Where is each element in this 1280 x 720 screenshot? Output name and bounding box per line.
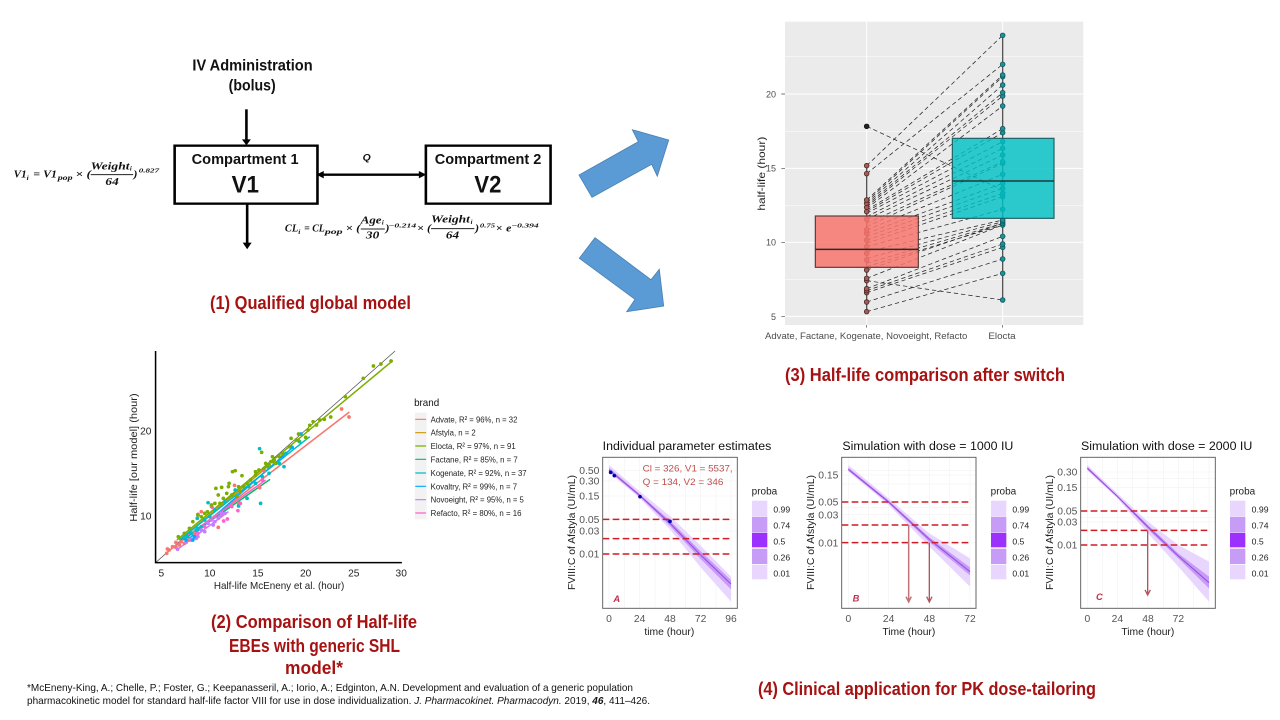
formula: V1 covariate model: Weight [91,161,131,172]
title: Simulation with dose = 2000 IU [1081,439,1252,453]
y axis labels [766,89,776,322]
panel border [603,457,737,608]
parameter annotation: Cl = 326, V1 = 5537, [643,464,733,474]
y axis labels: 0.01 [579,550,600,561]
legend: proba: 0.99 [1012,504,1029,514]
y axis title: FVIII:C of Afstyla (UI/mL) [1045,475,1056,590]
observed points [609,470,672,523]
x axis labels: 24 [1112,614,1123,625]
x axis labels [606,614,737,625]
panel C: simulation with dose 2000 IU [1045,439,1269,638]
caption: (2) Comparison of Half-life: EBEs with generic SHL [229,636,400,656]
y axis title: Half-life [our model] (hour) [129,393,140,522]
axis tick labels: 20 [300,569,312,580]
legend: brand: Elocta, R² = 97%, n = 91 [431,441,516,451]
axis tick labels: 5 [159,569,165,580]
panel: half-life scatter chart [129,351,527,592]
y axis labels: 0.03 [1057,518,1078,529]
regression lines [166,361,393,553]
parameter annotation: Q = 134, V2 = 346 [643,477,723,487]
legend: proba: 0.26 [1012,552,1029,562]
x axis labels: 48 [1142,614,1154,625]
formula: clearance covariate model: ) [474,223,479,234]
y axis title: FVIII:C of Afstyla (UI/mL) [567,475,578,590]
axis ticks [781,94,1003,328]
x axis labels: 0 [1084,614,1090,625]
footnote: reference: *McEneny-King, A.; Chelle, P.; Foster, G.; Keepanasseril, A.; Iorio, A.; Edginton, A.N. Development and evaluation of a generic population [27,682,633,694]
whiskers [867,35,1003,312]
formula: clearance covariate model: × ( [417,223,432,234]
x axis title: Time (hour) [882,627,935,638]
x axis labels: 24 [883,614,895,625]
box: compartment 2: V2 [474,171,501,198]
legend: proba: 0.01 [773,568,790,578]
legend: proba: 0.5 [1012,536,1025,546]
legend: proba: 0.74 [1252,520,1269,530]
legend: proba [1230,487,1269,579]
panel B: simulation with dose 1000 IU [806,439,1029,638]
legend: brand: Factane, R² = 85%, n = 7 [431,454,518,464]
data points: after switch [1000,33,1005,302]
y axis labels: 0.03 [579,527,600,538]
legend: brand: Kovaltry, R² = 99%, n = 7 [431,481,517,491]
legend: brand: brand [414,398,439,409]
axis tick labels: 10 [140,511,152,522]
formula: V1 covariate model: × ( [75,169,93,180]
formula: V1 covariate model: V1 [14,169,27,180]
formula: clearance covariate model [285,214,539,241]
legend: proba: 0.99 [1252,504,1269,514]
legend: proba: 0.01 [1012,568,1029,578]
y axis title: FVIII:C of Afstyla (UI/mL) [806,475,817,590]
formula: V1 covariate model: 64 [105,176,119,188]
footnote: reference: pharmacokinetic model for standard half-life factor VIII for use in dose individualization. J. Pharmacokinet. Pharmacodyn. 2019, 46, 411–426. [27,695,650,707]
y axis labels: 0.30 [579,477,600,488]
y axis labels [818,471,839,549]
threshold lines [842,502,971,543]
legend: proba: proba [991,487,1017,498]
y axis labels: 0.05 [818,498,839,509]
formula: clearance covariate model: i [382,220,384,227]
y axis labels: 0.50 [579,466,600,477]
box: compartment 2: Compartment 2 [435,152,541,168]
formula: clearance covariate model: i [471,219,473,226]
arrow: up to half-life comparison [579,130,669,197]
panel letter C: C [1096,592,1103,602]
formula: clearance covariate model: −0.394 [511,222,539,229]
grid [1081,457,1215,608]
legend: proba: 0.74 [1012,520,1029,530]
arrow: dose into compartment 1 [242,109,251,145]
axis tick labels: 20 [140,427,152,438]
x axis labels [1084,614,1184,625]
x axis labels: Advate, Factane, Kogenate, Novoeight, Refacto [765,331,967,341]
plot background and grid [785,22,1083,325]
formula: clearance covariate model: e [506,223,511,234]
caption: (1) Qualified global model: (1) Qualified global model [210,293,411,313]
probability ribbon [1087,465,1209,602]
heading: IV Administration: IV Administration [192,57,313,74]
probability ribbon [848,465,970,587]
y axis labels: 10 [766,238,776,248]
legend: brand: Afstyla, n = 2 [431,428,476,438]
y axis labels: 0.03 [818,510,839,521]
data points by brand [167,361,391,553]
panel border [1081,457,1215,608]
caption: (2) Comparison of Half-life: model* [285,658,343,678]
legend: proba: 0.99 [773,504,790,514]
y axis labels: 0.30 [1057,468,1078,479]
box: before switch [815,216,918,267]
x axis labels [845,614,976,625]
formula: clearance covariate model: pop [323,227,343,236]
box: compartment 2 [426,146,551,204]
arrow: exchange Q between compartments: Q [363,153,371,163]
y axis labels: 0.05 [1057,507,1078,518]
threshold lines [1081,511,1210,545]
data points: before switch [864,124,869,314]
box: compartment 1: V1 [232,171,259,198]
y axis labels: 20 [766,89,776,99]
x axis labels: Elocta [988,331,1016,341]
x axis labels: 72 [964,614,976,625]
probability ribbon [609,465,731,602]
legend: brand: Novoeight, R² = 95%, n = 5 [431,495,524,505]
x axis labels: 0 [845,614,851,625]
panel letter B: B [853,593,860,603]
formula: V1 covariate model: ) [133,169,138,180]
caption: (4) Clinical application for PK dose-tailoring: (4) Clinical application for PK dose-tailoring [758,679,1096,699]
paired dashed lines [867,35,1003,312]
formula: clearance covariate model: −0.214 [389,222,417,229]
formula: clearance covariate model: Age [360,215,381,226]
y axis labels: 0.05 [579,515,600,526]
parameter annotation [643,464,733,487]
x axis labels: 0 [606,614,612,625]
formula: clearance covariate model: 0.75 [480,222,496,229]
formula: V1 covariate model: 0.827 [139,167,160,175]
formula: V1 covariate model: i [27,174,29,182]
legend: brand: Advate, R² = 96%, n = 32 [431,414,518,424]
x axis labels: 48 [664,614,676,625]
panel: compartment model diagram [14,57,551,249]
legend: brand: Refacto, R² = 80%, n = 16 [431,508,522,518]
formula: V1 covariate model: i [130,166,132,173]
formula: clearance covariate model: × ( [346,223,362,234]
legend: brand: Kogenate, R² = 92%, n = 37 [431,468,527,478]
heading: IV Administration: (bolus) [229,77,276,94]
formula: clearance covariate model: CL [285,223,298,234]
panel border [842,457,976,608]
x axis labels: 24 [634,614,646,625]
axes [156,351,402,563]
y axis title: half-life (hour) [757,137,768,211]
legend: proba: 0.5 [773,536,786,546]
formula: clearance covariate model: ) [384,223,390,234]
legend: proba [752,487,790,579]
caption: (3) Half-life comparison after switch: (3) Half-life comparison after switch [785,365,1065,385]
x axis title: Half-life McEneny et al. (hour) [214,581,344,592]
y axis labels: 15 [766,164,776,174]
x axis title: time (hour) [644,627,694,638]
arrow to target time [1145,530,1150,595]
axis tick labels: 15 [252,569,264,580]
panel letter A: A [612,594,620,604]
x axis title: Time (hour) [1121,627,1174,638]
y axis labels: 5 [771,312,776,322]
heading: IV Administration [192,57,313,94]
legend: proba: proba [752,487,778,498]
axis tick labels [140,427,407,580]
identity line [156,351,395,563]
title: Simulation with dose = 1000 IU [842,439,1013,453]
panel: half-life boxplot [757,22,1083,341]
axis tick labels: 25 [348,569,360,580]
legend: proba: 0.5 [1252,536,1264,546]
footnote: reference [27,682,650,707]
formula: V1 covariate model: pop [56,173,73,182]
title: Individual parameter estimates [603,439,771,453]
y axis labels: 0.15 [579,492,600,503]
grid [603,457,737,608]
formula: V1 covariate model: = V1 [33,169,57,180]
formula: clearance covariate model: × [496,223,503,234]
formula: V1 covariate model [14,161,160,188]
formula: clearance covariate model: = CL [304,223,325,234]
arrow: down to half-life comparison [579,238,664,312]
caption: (2) Comparison of Half-life: (2) Comparison of Half-life [211,612,417,632]
y axis labels: 0.01 [1057,541,1078,552]
legend: proba: 0.74 [773,520,790,530]
x axis labels: 72 [1173,614,1184,625]
box: after switch [952,138,1054,218]
panel A: individual parameter estimates [567,439,790,638]
arrow: elimination from compartment 1 [243,204,252,249]
y axis labels: 0.15 [818,471,839,482]
box: compartment 1 [175,146,317,204]
legend: proba: 0.01 [1252,568,1269,578]
caption: (2) Comparison of Half-life [211,612,417,678]
legend: brand [414,398,527,519]
x axis labels: 48 [924,614,935,625]
formula: clearance covariate model: 30 [365,230,380,241]
y axis labels: 0.01 [818,538,839,549]
threshold lines [603,519,732,554]
legend: proba: proba [1230,487,1256,498]
arrows to target times [906,525,932,602]
axis tick labels: 10 [204,569,216,580]
legend: proba: 0.26 [773,552,790,562]
grid [842,457,976,608]
x axis labels: 72 [695,614,707,625]
legend: proba: 0.26 [1252,552,1269,562]
arrow: exchange Q between compartments [316,153,426,178]
y axis labels [1057,468,1078,552]
formula: clearance covariate model: 64 [446,230,460,241]
y axis labels: 0.15 [1057,483,1078,494]
axis tick labels: 30 [396,569,407,580]
x axis labels: 96 [725,614,737,625]
box: compartment 1: Compartment 1 [192,152,299,168]
formula: clearance covariate model: Weight [431,214,471,225]
legend: proba [991,487,1029,579]
formula: clearance covariate model: i [298,228,300,236]
y axis labels [579,466,600,561]
